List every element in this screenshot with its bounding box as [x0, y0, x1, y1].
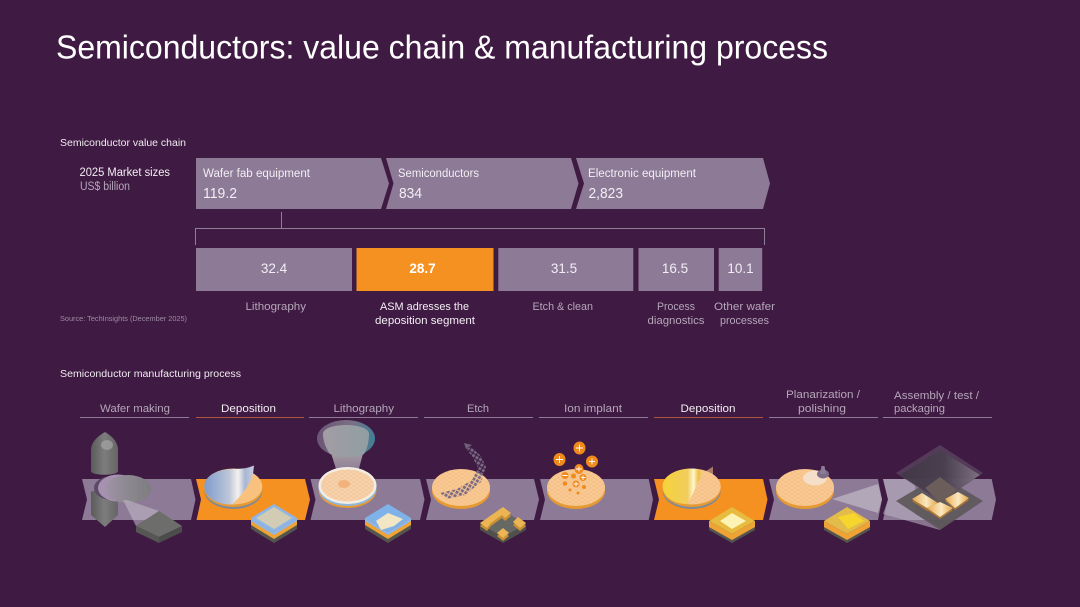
- icon: planarization wafer: [776, 466, 834, 509]
- segment: deposition (highlighted): 28.7: [409, 261, 436, 276]
- segment: deposition (highlighted): [356, 248, 494, 327]
- process arrows: [82, 479, 996, 520]
- source note: Source: TechInsights (December 2025): [60, 314, 187, 323]
- segment: lithography: Lithography: [246, 301, 307, 313]
- segment: etch and clean: [498, 248, 633, 313]
- segment: other wafer processes: [714, 248, 775, 327]
- arrow: semiconductors: [386, 158, 578, 209]
- icon: deposition chip 1: [251, 504, 297, 543]
- icon: etch chip: [480, 507, 526, 543]
- arrow: semiconductors: 834: [399, 186, 422, 202]
- icon: deposition wafer 1: [204, 466, 262, 509]
- heading: manufacturing process: Semiconductor manufacturing process: [60, 369, 241, 380]
- segment: process diagnostics: [638, 248, 714, 327]
- icon: etch wafer: [432, 443, 490, 509]
- step labels: Lithography: [334, 403, 395, 415]
- icon: assembly package: [832, 445, 983, 530]
- panel: manufacturing process: [60, 369, 996, 543]
- arrow: electronic equipment: Electronic equipment: [588, 168, 697, 180]
- arrow: wafer fab equipment: 119.2: [203, 186, 237, 202]
- icon: planarization chip: [824, 507, 870, 543]
- segment: other wafer processes: processes: [720, 315, 769, 327]
- segment: deposition (highlighted): ASM adresses the: [380, 301, 469, 313]
- arrow: electronic equipment: 2,823: [588, 186, 623, 202]
- market sizes label: US$ billion: [80, 181, 130, 193]
- icon: deposition wafer 2: [663, 466, 721, 509]
- icon: ion implant wafer: [547, 442, 605, 509]
- arrow: wafer fab equipment: [196, 158, 389, 209]
- market sizes label: 2025 Market sizes: [80, 167, 170, 179]
- icon: wafer making: [91, 432, 182, 543]
- segment: other wafer processes: 10.1: [727, 261, 754, 276]
- segment: deposition (highlighted): deposition segment: [375, 315, 475, 327]
- step labels: Assembly / test /: [894, 390, 980, 402]
- segment: process diagnostics: 16.5: [662, 261, 688, 276]
- step labels: Etch: [467, 403, 489, 415]
- icon: deposition chip 2: [709, 507, 755, 543]
- segment: etch and clean: 31.5: [551, 261, 577, 276]
- step labels: Deposition: [680, 403, 736, 415]
- step labels: Wafer making: [100, 403, 170, 415]
- arrow: wafer fab equipment: Wafer fab equipment: [203, 168, 311, 180]
- icon: lithography chip: [365, 504, 411, 543]
- panel: value chain: [60, 138, 775, 327]
- step labels: Ion implant: [564, 403, 622, 415]
- heading: value chain: Semiconductor value chain: [60, 138, 186, 149]
- step labels: Deposition: [221, 403, 276, 415]
- step labels: [80, 389, 992, 418]
- segment: etch and clean: Etch & clean: [532, 301, 593, 313]
- step labels: packaging: [894, 403, 945, 415]
- step labels: Planarization /: [786, 389, 861, 401]
- segment: process diagnostics: Process: [657, 301, 695, 313]
- segment: lithography: 32.4: [261, 261, 288, 276]
- market sizes label: [80, 167, 170, 193]
- arrow: electronic equipment: [576, 158, 770, 209]
- arrow: semiconductors: Semiconductors: [398, 168, 479, 180]
- title: Semiconductors: value chain & manufacturing process: [56, 28, 828, 66]
- segment: other wafer processes: Other wafer: [714, 301, 775, 313]
- segment: lithography: [196, 248, 352, 313]
- icon: lithography wafer: [317, 420, 376, 508]
- segment: process diagnostics: diagnostics: [648, 315, 705, 327]
- step labels: polishing: [798, 403, 846, 415]
